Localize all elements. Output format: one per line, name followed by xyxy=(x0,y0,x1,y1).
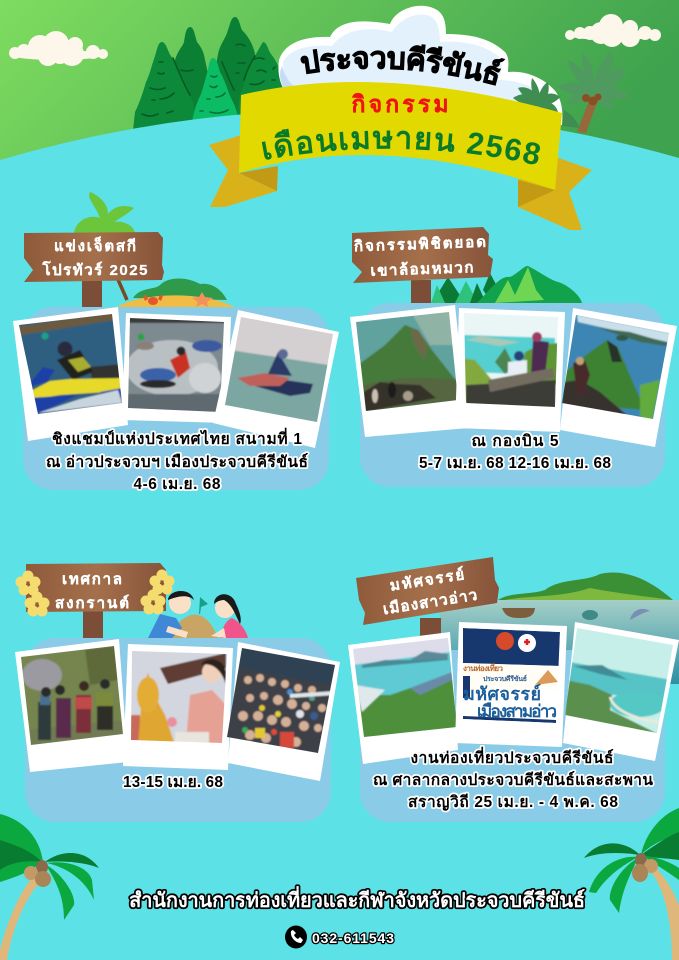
photo: dancers xyxy=(15,639,130,772)
panel: amazing three bays xyxy=(348,557,679,822)
icon: big title cloud xyxy=(278,6,562,125)
ribbon right fold xyxy=(518,180,555,207)
illustration: seascape with island xyxy=(440,572,679,684)
ribbon right tail xyxy=(518,157,592,230)
icon: provincial seal xyxy=(496,632,514,650)
sign post xyxy=(411,280,431,306)
photo: bay aerial xyxy=(560,622,679,761)
sign board xyxy=(356,557,499,625)
caption: 4-6 เม.ย. 68 xyxy=(134,476,221,493)
blue card xyxy=(23,307,329,490)
caption: ณ ศาลากลางประจวบคีรีขันธ์และสะพาน xyxy=(373,771,653,789)
poster title xyxy=(463,662,557,721)
photo: event poster xyxy=(455,622,567,747)
caption xyxy=(46,427,308,493)
photo: mountain peak group xyxy=(350,305,468,437)
icon: left cream cloud xyxy=(9,31,108,66)
icon: children with sand pagoda xyxy=(148,591,248,638)
sign text: เขาล้อมหมวก xyxy=(370,259,474,280)
caption: ณ อ่าวประจวบฯ เมืองประจวบคีรีขันธ์ xyxy=(46,453,308,471)
photo: jet ski at sea xyxy=(213,310,340,448)
background: green hill sky xyxy=(0,0,679,200)
icon: right coconut palm xyxy=(584,808,679,960)
icon: pine trees xyxy=(133,17,292,130)
poster title: งานท่องเที่ยว xyxy=(463,662,504,673)
sign text: มหัศจรรย์ xyxy=(389,565,465,595)
caption: สราญวิถี 25 เม.ย. - 4 พ.ค. 68 xyxy=(408,793,618,811)
ribbon left fold xyxy=(239,166,278,191)
sign post xyxy=(420,618,441,643)
sign text xyxy=(42,236,148,279)
icon: crab xyxy=(143,295,163,305)
poster mountain xyxy=(535,670,558,685)
sign text: แข่งเจ็ตสกี xyxy=(54,236,136,255)
poster title: ประจวบคีรีขันธ์ xyxy=(483,674,527,683)
sign text: สงกรานต์ xyxy=(55,594,129,612)
photo: jet ski yellow xyxy=(10,305,130,441)
sign text: เมืองสาวอ่าว xyxy=(382,587,478,618)
title text xyxy=(302,68,500,86)
icon: turtle xyxy=(582,610,598,620)
icon: dolphin xyxy=(630,609,650,620)
sign text: กิจกรรมพิชิตยอด xyxy=(354,233,486,255)
sign text xyxy=(382,565,478,618)
ribbon left tail xyxy=(209,135,277,207)
icon: right cream cloud xyxy=(565,14,661,47)
photo: pouring water on Buddha xyxy=(123,644,233,770)
icon: small palm in front of cloud xyxy=(513,78,560,112)
photo: water fight crowd xyxy=(225,642,340,781)
panel: mountain hike xyxy=(350,227,677,487)
sign board xyxy=(24,232,164,282)
banner: ribbon with title: ประจวบคีรีขันธ์ xyxy=(300,44,506,86)
icon: boat xyxy=(502,608,535,618)
sign text: โปรทัวร์ 2025 xyxy=(42,260,148,279)
banner: ribbon with title xyxy=(209,44,592,230)
photo: ridge over blue sea xyxy=(560,308,677,447)
panel: jet ski xyxy=(10,192,340,493)
icon: phone xyxy=(285,926,307,948)
sign post xyxy=(82,280,102,308)
subtitle: month xyxy=(263,148,540,166)
poster title: มหัศจรรย์ xyxy=(463,683,541,704)
caption: 13-15 เม.ย. 68 xyxy=(123,774,223,791)
icon: trees and mountain xyxy=(431,266,582,303)
photo: coast viewpoint xyxy=(348,630,460,764)
photo: hikers at summit sign xyxy=(455,308,565,432)
banner: ribbon with title: เดือนเมษายน 2568 xyxy=(262,128,540,164)
blue card xyxy=(25,638,331,822)
sign post xyxy=(83,610,103,640)
sign text: เทศกาล xyxy=(62,571,122,588)
blue card xyxy=(360,303,665,487)
icon: left coconut palm xyxy=(0,814,99,960)
caption xyxy=(419,432,611,472)
icon: small palm right of banner xyxy=(562,110,580,128)
caption: งานท่องเที่ยวประจวบคีรีขันธ์ xyxy=(410,746,614,767)
footer: phone number: 032-611543 xyxy=(312,930,394,946)
icon: plumeria flowers xyxy=(16,570,174,616)
ribbon body xyxy=(239,82,562,190)
photo: jet ski spray xyxy=(122,313,231,423)
sign text xyxy=(354,233,486,280)
caption: ชิงแชมป์แห่งประเทศไทย สนามที่ 1 xyxy=(52,427,302,448)
caption: ณ กองบิน 5 xyxy=(472,432,559,450)
icon: red cross logo xyxy=(518,634,536,652)
sign board xyxy=(26,563,166,612)
footer: organisation name: สำนักงานการท่องเที่ยวและกีฬาจังหวัดประจวบคีรีขันธ์ xyxy=(129,885,585,912)
subtitle: activity: กิจกรรม xyxy=(351,91,448,117)
blue card xyxy=(360,650,665,822)
poster title: เมืองสามอ่าว xyxy=(477,701,557,721)
caption xyxy=(373,746,653,811)
sign text xyxy=(55,571,129,612)
icon: palm behind sign xyxy=(74,192,135,300)
caption: 5-7 เม.ย. 68 12-16 เม.ย. 68 xyxy=(419,455,611,472)
sign board xyxy=(352,227,493,283)
icon: starfish xyxy=(192,292,213,307)
panel: songkran xyxy=(15,563,340,822)
icon: beach island xyxy=(117,278,235,307)
icon: background palm tree xyxy=(557,52,630,133)
